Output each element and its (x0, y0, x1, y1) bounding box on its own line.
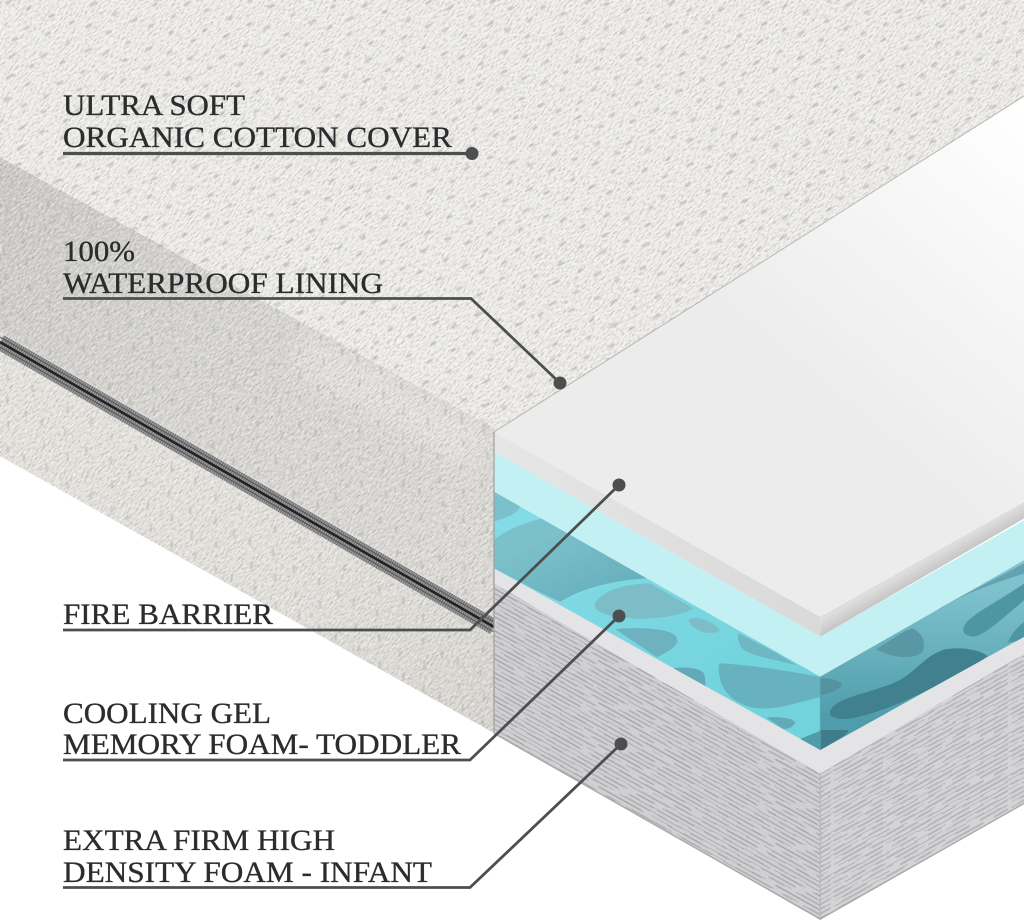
callout text (63, 824, 432, 889)
callout text: FIRE BARRIER (63, 598, 273, 631)
callout: extra firm high density foam (63, 738, 628, 889)
leader line (63, 616, 619, 760)
leader dot (466, 147, 478, 160)
callout text (63, 235, 383, 300)
callout text (63, 697, 461, 761)
cooling gel memory foam layer (494, 452, 1024, 752)
callout text: 100% (63, 235, 135, 268)
leader dot (614, 738, 628, 750)
callout text: ULTRA SOFT (63, 89, 245, 122)
callout text: DENSITY FOAM - INFANT (63, 856, 432, 889)
callout: fire barrier (63, 478, 626, 631)
leader dot (554, 376, 566, 390)
callout: ultra soft organic cotton cover (63, 89, 478, 160)
panel: cotton cover top face (0, 0, 1024, 432)
callout text: ORGANIC COTTON COVER (63, 121, 452, 154)
panel: mattress layers cutaway (494, 432, 1024, 920)
callout text: EXTRA FIRM HIGH (63, 824, 335, 857)
top sheet surface (494, 96, 1024, 733)
extra firm foam layer (494, 568, 1024, 920)
leader line (63, 152, 472, 155)
leader dot (612, 610, 626, 622)
panel: cotton cover side face (0, 157, 494, 733)
zipper (0, 333, 494, 632)
callout text: MEMORY FOAM- TODDLER (63, 728, 461, 761)
callout text (63, 89, 452, 154)
leader line (63, 298, 560, 383)
leader dot (612, 478, 626, 492)
callout: 100% waterproof lining (63, 235, 566, 390)
fire barrier layer (494, 432, 1024, 637)
leader line (63, 485, 619, 630)
callout text: WATERPROOF LINING (63, 267, 383, 300)
callout: cooling gel memory foam (63, 610, 626, 761)
leader line (63, 744, 621, 888)
callout text: COOLING GEL (63, 697, 271, 730)
